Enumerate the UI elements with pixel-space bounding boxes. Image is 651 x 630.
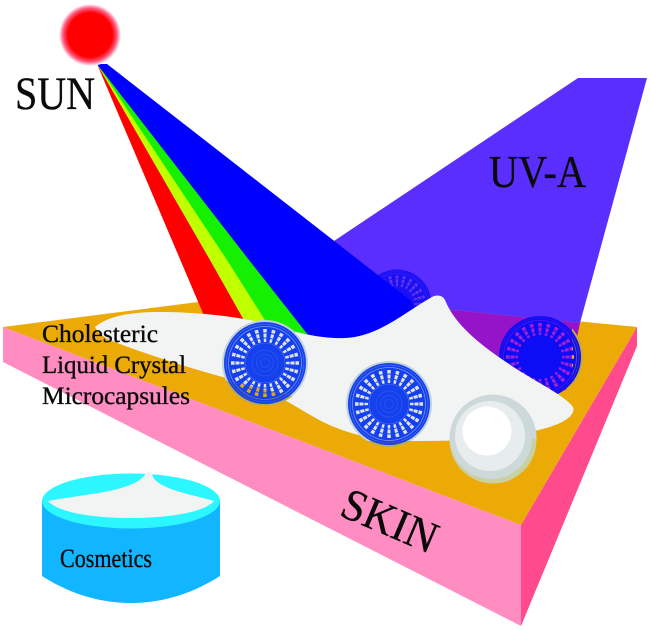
line: Microcapsules: Microcapsules <box>42 383 190 410</box>
jar body <box>42 501 220 603</box>
capsule on cream, left <box>222 320 308 406</box>
skin right face <box>521 327 637 626</box>
green band <box>97 64 312 340</box>
yellow band <box>97 64 268 325</box>
capsule on cream, centre <box>346 361 432 447</box>
cosmetics jar <box>42 471 220 603</box>
label: SKIN: SKIN <box>334 478 446 563</box>
jar rim <box>42 474 220 528</box>
cream in jar <box>48 471 214 518</box>
blue band <box>97 64 425 345</box>
label: capsules <box>42 321 190 410</box>
UV-A beam on skin <box>400 304 580 390</box>
line: Liquid Crystal: Liquid Crystal <box>42 352 186 379</box>
sun <box>59 4 121 66</box>
cream layer <box>95 296 573 441</box>
white pearl capsule <box>450 395 537 484</box>
line: Cholesteric: Cholesteric <box>42 321 158 348</box>
label: UV-A: UV-A <box>489 147 586 197</box>
capsule under UV-A <box>499 316 583 394</box>
UV-A beam <box>331 78 647 323</box>
skin block <box>3 292 637 626</box>
rainbow beam from the sun <box>97 64 425 345</box>
red band <box>97 64 245 322</box>
label: SUN: SUN <box>15 68 95 120</box>
skin top surface <box>3 292 637 525</box>
skin front face <box>3 327 521 626</box>
label: Cosmetics: Cosmetics <box>60 544 152 573</box>
capsule behind the beam <box>361 268 433 340</box>
